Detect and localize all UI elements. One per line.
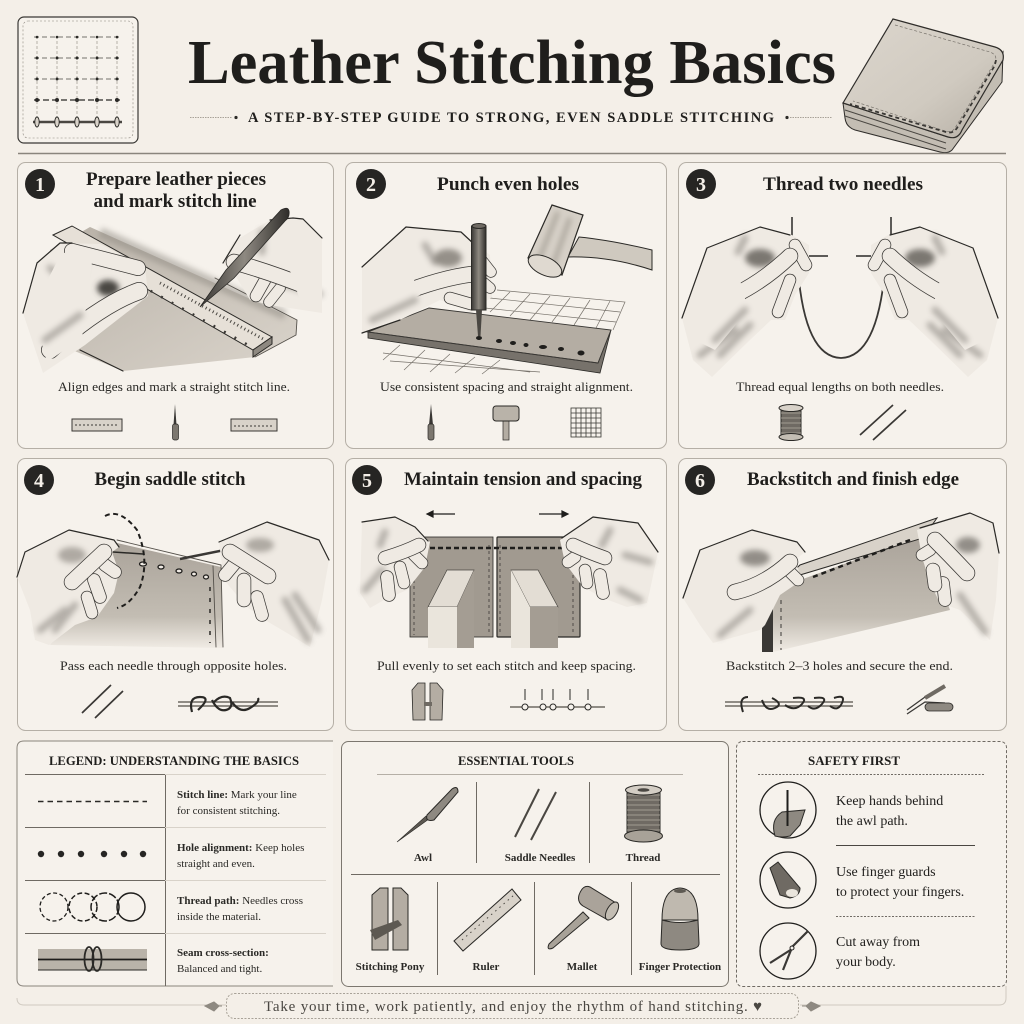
divider xyxy=(18,152,1006,154)
step 2 illustration xyxy=(362,205,652,374)
step 6 number xyxy=(685,465,715,495)
step 4 number: 4 xyxy=(34,470,44,492)
safety item 2: Use finger guards xyxy=(836,865,936,880)
step 6 heading: Backstitch and finish edge xyxy=(747,470,959,490)
legend grid xyxy=(25,774,326,986)
safety item 2 xyxy=(760,852,964,908)
step 1 number xyxy=(25,169,55,199)
step 1 heading xyxy=(86,170,266,212)
legend: hole alignment: Hole alignment: Keep holes xyxy=(177,842,304,854)
right wood block xyxy=(511,570,558,648)
arrow: left xyxy=(427,511,455,517)
tool: thread xyxy=(624,785,662,864)
panel: essential tools xyxy=(342,742,728,986)
panel 5: tension and spacing xyxy=(346,458,666,730)
icon: grid mat xyxy=(571,408,601,437)
step 3 heading: Thread two needles xyxy=(763,175,923,195)
panel 2: punch even holes xyxy=(346,162,666,448)
panel 1: prepare leather xyxy=(18,162,334,448)
legend: thread path xyxy=(40,893,303,923)
legend: thread path: Thread path: Needles cross xyxy=(177,895,303,907)
left hand xyxy=(362,227,492,333)
icon: stitch path xyxy=(178,697,278,712)
legend: hole alignment: straight and even. xyxy=(177,858,255,870)
panel: safety first xyxy=(736,742,1006,986)
icon: mallet xyxy=(493,406,519,440)
icon: awl xyxy=(428,404,434,440)
footer outline xyxy=(17,986,1006,1005)
tool: finger protection xyxy=(639,888,721,973)
step 4 caption: Pass each needle through opposite holes. xyxy=(60,659,287,673)
header xyxy=(18,17,1003,153)
left hand xyxy=(23,243,148,373)
safety item 3: Cut away from xyxy=(836,935,920,950)
icon: ruler xyxy=(72,419,122,431)
right hand xyxy=(560,517,658,607)
left hand xyxy=(683,530,805,643)
step 1 heading: and mark stitch line xyxy=(94,192,256,212)
left hand xyxy=(17,530,119,645)
tool: ruler xyxy=(454,889,521,973)
tool: saddle needles xyxy=(505,789,576,864)
legend: seam cross-section: Seam cross-section: xyxy=(177,947,269,959)
legend: hole alignment xyxy=(38,842,304,870)
footer message: Take your time, work patiently, and enjoy the rhythm of hand stitching. ♥ xyxy=(264,999,762,1015)
step 4 number xyxy=(24,465,54,495)
step 3 caption: Thread equal lengths on both needles. xyxy=(736,380,944,394)
safety item 3 xyxy=(760,923,920,979)
step 3 illustration xyxy=(682,217,998,377)
step 1 heading: Prepare leather pieces xyxy=(86,170,266,190)
legend: stitch line: for consistent stitching. xyxy=(177,805,280,817)
step 2 number xyxy=(356,169,386,199)
step 5 heading: Maintain tension and spacing xyxy=(404,470,643,490)
left hand xyxy=(360,517,430,608)
leaf ornament left xyxy=(205,1002,222,1011)
step 6 caption: Backstitch 2–3 holes and secure the end. xyxy=(726,659,953,673)
tool: ruler: Ruler xyxy=(473,961,500,973)
icon: stitching pony xyxy=(412,683,443,720)
step 4 heading: Begin saddle stitch xyxy=(94,470,246,490)
step 4 illustration xyxy=(17,514,329,648)
legend heading: LEGEND: UNDERSTANDING THE BASICS xyxy=(49,754,299,768)
title: Leather Stitching Basics xyxy=(188,29,836,97)
step 3 number: 3 xyxy=(696,174,706,196)
panel 4: begin saddle stitch xyxy=(17,458,334,730)
step 2 heading: Punch even holes xyxy=(437,175,579,195)
step 1 number: 1 xyxy=(35,174,45,196)
left wood block xyxy=(428,570,474,648)
step 1 illustration xyxy=(23,208,322,373)
tool: finger protection: Finger Protection xyxy=(639,961,721,973)
legend: seam cross-section: Balanced and tight. xyxy=(177,963,262,975)
pencil awl xyxy=(200,208,289,307)
icon: stitch marks xyxy=(510,689,605,710)
tool: awl xyxy=(397,788,458,864)
icon: awl xyxy=(172,404,178,440)
left hand xyxy=(682,227,809,377)
step 2 number: 2 xyxy=(366,174,376,196)
footer message xyxy=(226,994,798,1018)
panel 3: thread two needles xyxy=(678,162,1006,448)
icon: cutting nippers xyxy=(907,686,953,714)
tool: mallet xyxy=(548,886,621,973)
arrow: right xyxy=(539,511,568,517)
step 5 number xyxy=(352,465,382,495)
safety item 2: to protect your fingers. xyxy=(836,885,964,900)
tool: saddle needles: Saddle Needles xyxy=(505,852,576,864)
mallet xyxy=(525,205,652,282)
panel 6: backstitch and finish xyxy=(678,458,1006,730)
right hand xyxy=(871,227,998,377)
step 1 caption: Align edges and mark a straight stitch line. xyxy=(58,380,290,394)
step 6 illustration xyxy=(683,513,999,652)
step 2 caption: Use consistent spacing and straight alignment. xyxy=(380,380,633,394)
legend: thread path: inside the material. xyxy=(177,911,261,923)
tools heading: ESSENTIAL TOOLS xyxy=(458,754,574,768)
tool: mallet: Mallet xyxy=(567,961,598,973)
icon: thread spool xyxy=(779,404,803,440)
icon: ruler xyxy=(231,419,277,431)
wallet illustration xyxy=(843,19,1003,153)
legend: stitch line: Stitch line: Mark your line xyxy=(177,789,297,801)
legend: seam cross-section xyxy=(38,947,269,975)
safety heading: SAFETY FIRST xyxy=(808,754,901,768)
safety item 1: the awl path. xyxy=(836,814,908,829)
subtitle ornaments xyxy=(190,116,832,119)
safety dividers xyxy=(758,774,985,916)
safety item 1: Keep hands behind xyxy=(836,794,943,809)
right hand xyxy=(917,513,999,640)
icon: needles xyxy=(82,685,123,718)
step 6 number: 6 xyxy=(695,470,705,492)
step 3 number xyxy=(686,169,716,199)
panel: legend xyxy=(17,741,333,986)
right hand xyxy=(219,522,329,647)
tool: stitching pony xyxy=(356,888,425,973)
punch tool xyxy=(472,224,486,336)
tool: stitching pony: Stitching Pony xyxy=(356,961,425,973)
tools grid xyxy=(377,774,683,776)
safety item 1 xyxy=(760,782,943,838)
stitch sampler card xyxy=(18,17,138,143)
leaf ornament right xyxy=(802,1002,820,1011)
tool: thread: Thread xyxy=(626,852,660,864)
step 5 number: 5 xyxy=(362,470,372,492)
icon: needles xyxy=(860,405,906,440)
legend: stitch line xyxy=(38,789,297,817)
right hand xyxy=(223,218,322,313)
safety item 3: your body. xyxy=(836,955,896,970)
subtitle: A STEP-BY-STEP GUIDE TO STRONG, EVEN SADDLE STITCHING xyxy=(248,110,774,126)
step 5 illustration xyxy=(360,517,658,648)
step 5 caption: Pull evenly to set each stitch and keep spacing. xyxy=(377,659,636,673)
tool: awl: Awl xyxy=(414,852,432,864)
icon: stitch path xyxy=(725,697,853,712)
